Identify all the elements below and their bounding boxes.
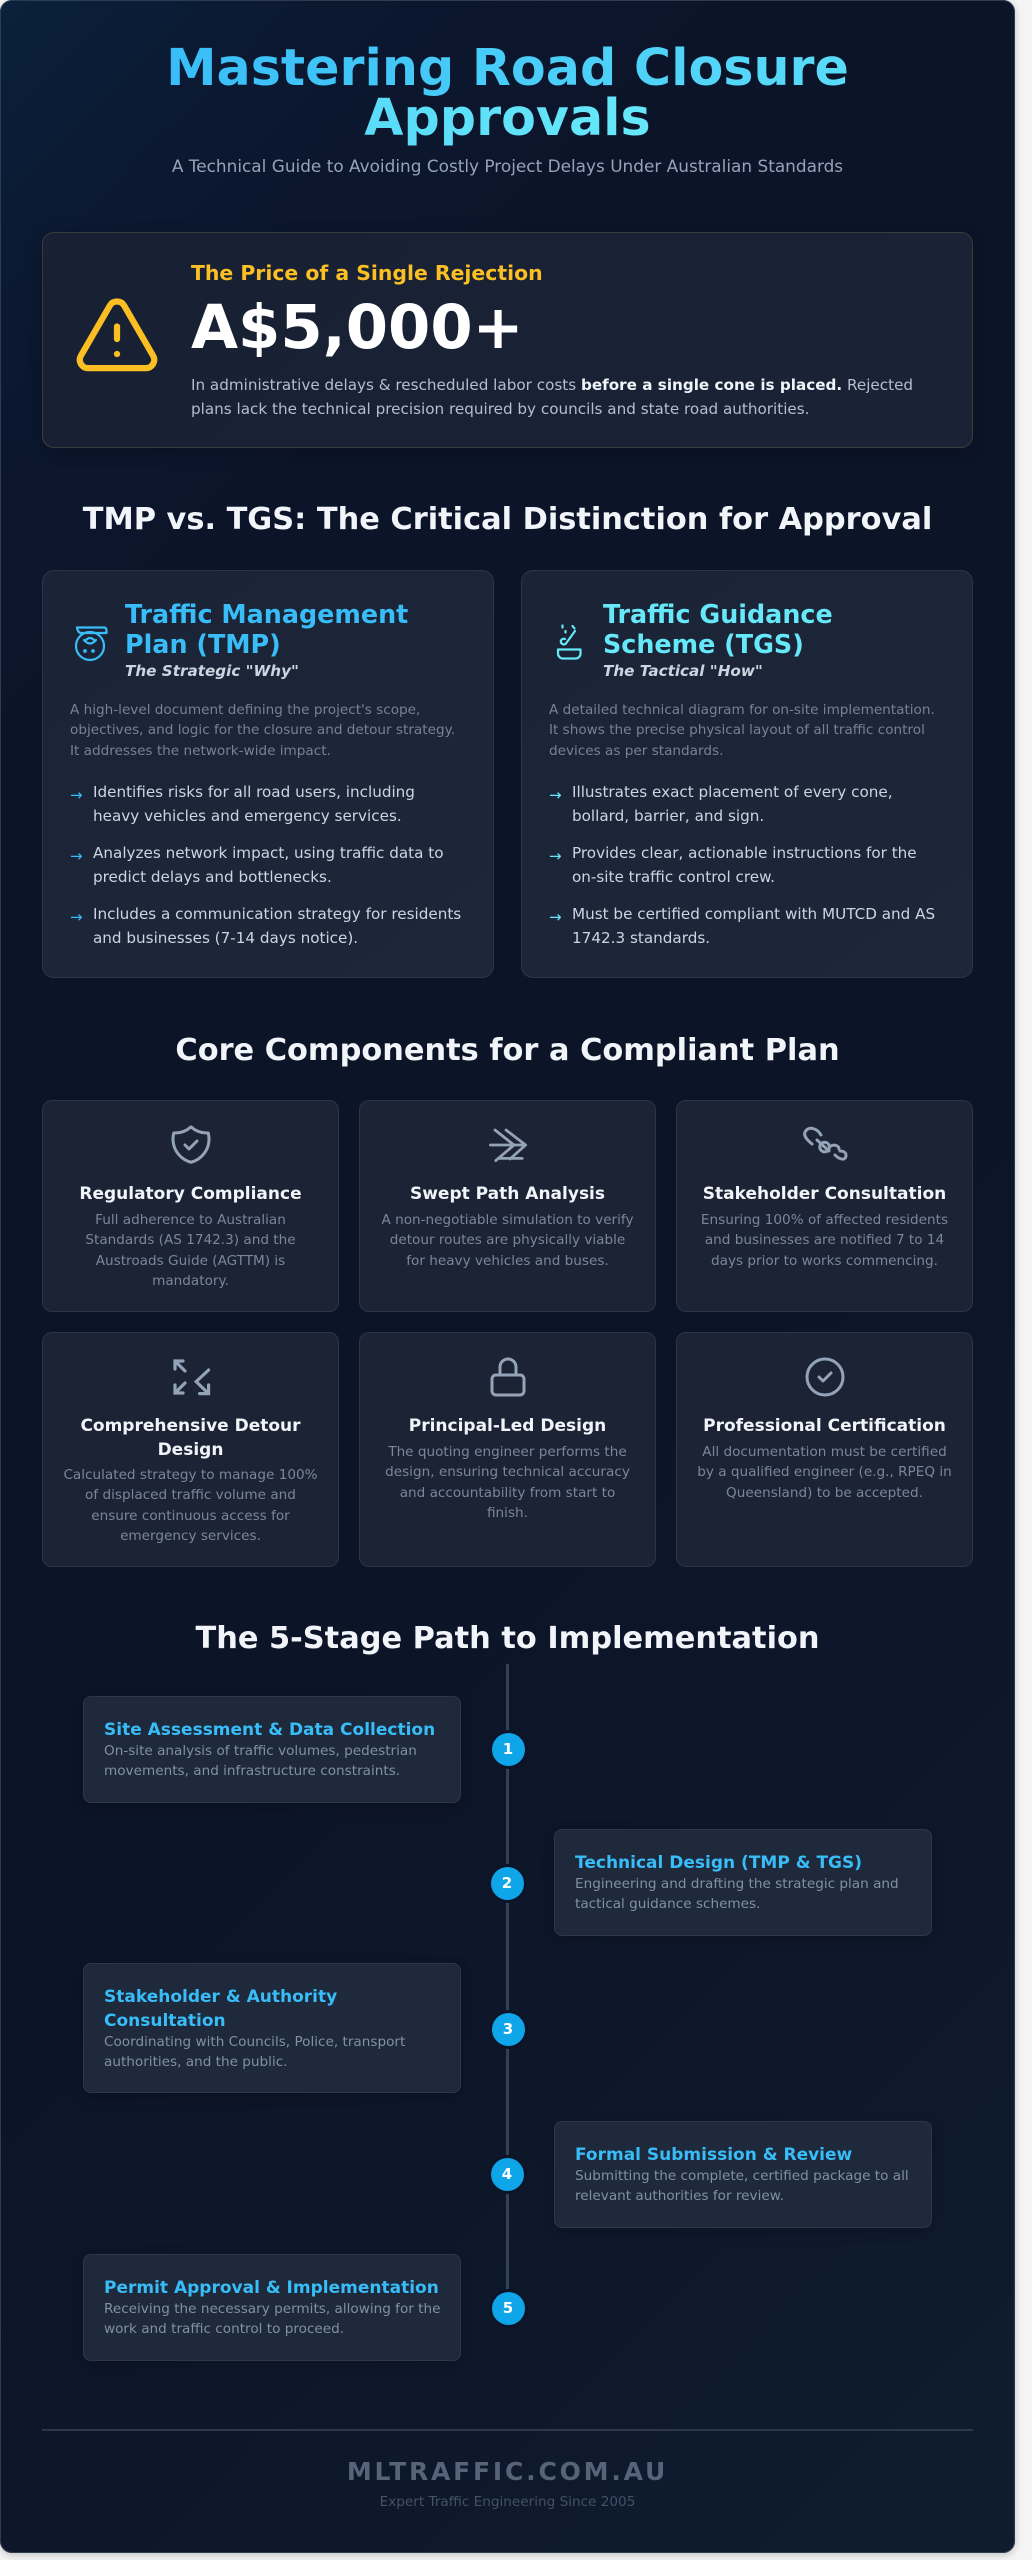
big cost figure: A$5,000+: [191, 293, 524, 363]
TMP point 2: [70, 844, 444, 886]
stage 1 card: [83, 1696, 461, 1803]
stage 5 text: Receiving the necessary permits, allowing for the: [104, 2301, 440, 2317]
stage 2 title: Technical Design (TMP & TGS): [575, 1853, 862, 1873]
stage 5 marker: [492, 2292, 524, 2325]
stage 2 card: [554, 1829, 932, 1936]
stage 2 text: tactical guidance schemes.: [575, 1896, 760, 1912]
feature text: Ensuring 100% of affected residents: [701, 1212, 948, 1228]
panel: regulatory compliance: [42, 1100, 339, 1312]
TMP subtitle: The Strategic "Why": [125, 662, 299, 680]
stage 2 marker: [490, 1867, 524, 1900]
TMP title: [125, 599, 408, 659]
panel: comprehensive detour design: [42, 1332, 339, 1567]
feature text: All documentation must be certified: [702, 1444, 947, 1460]
panel: professional certification: [676, 1332, 973, 1567]
feature text: [63, 1467, 318, 1544]
stage 5 text: work and traffic control to proceed.: [104, 2321, 344, 2337]
TMP point 3: and businesses (7-14 days notice).: [93, 929, 358, 947]
TGS point 2: Provides clear, actionable instructions for the: [572, 844, 917, 862]
icon: TGS: [556, 624, 582, 660]
heading: core components: Core Components for a Compliant Plan: [175, 1033, 840, 1068]
TGS title: [603, 599, 833, 659]
TMP point 1: →: [70, 786, 83, 804]
TGS title: Scheme (TGS): [603, 629, 804, 659]
feature title: Swept Path Analysis: [410, 1184, 605, 1204]
panel: stakeholder consultation: [676, 1100, 973, 1312]
stage 4 text: relevant authorities for review.: [575, 2188, 784, 2204]
TMP description: A high-level document defining the project's scope,: [70, 702, 420, 718]
TGS point 2: [549, 844, 917, 886]
stage 3 text: authorities, and the public.: [104, 2054, 288, 2070]
feature text: [381, 1212, 634, 1269]
stage 4 text: Submitting the complete, certified package to all: [575, 2168, 909, 2184]
feature title: [80, 1416, 301, 1460]
cost explanation: plans lack the technical precision required by councils and state road authorities.: [191, 400, 810, 418]
stage 1 marker: 1: [503, 1740, 513, 1758]
panel: principal-led design: [359, 1332, 656, 1567]
feature text: Standards (AS 1742.3) and the: [85, 1232, 296, 1248]
TMP point 3: [70, 905, 461, 947]
TMP description: objectives, and logic for the closure and detour strategy.: [70, 722, 455, 738]
TGS description: devices as per standards.: [549, 743, 723, 759]
TMP point 1: heavy vehicles and emergency services.: [93, 807, 402, 825]
stage 3 title: [104, 1987, 337, 2031]
icon: TMP: [74, 626, 108, 662]
stage 2 marker: 2: [502, 1874, 512, 1892]
stage 1 text: [104, 1743, 417, 1779]
TMP title: Traffic Management: [125, 599, 408, 629]
stage 5 marker: 5: [503, 2299, 513, 2317]
feature text: Full adherence to Australian: [95, 1212, 286, 1228]
feature text: mandatory.: [152, 1273, 229, 1289]
icon: check circle: [806, 1358, 844, 1396]
feature text: emergency services.: [120, 1528, 261, 1544]
subtitle: A Technical Guide to Avoiding Costly Project Delays Under Australian Standards: [172, 156, 843, 176]
feature text: and businesses are notified 7 to 14: [705, 1232, 944, 1248]
stage 3 marker: [492, 2013, 524, 2046]
stage 3 title: Stakeholder & Authority: [104, 1987, 337, 2007]
feature title: Principal-Led Design: [409, 1416, 606, 1436]
TGS description: It shows the precise physical layout of all traffic control: [549, 722, 925, 738]
icon: swept path: [489, 1128, 527, 1162]
feature title: Regulatory Compliance: [79, 1184, 302, 1204]
title: Approvals: [364, 88, 651, 147]
stage 5 card: [83, 2254, 461, 2361]
timeline: [83, 1664, 932, 2361]
heading: 5-stage path: The 5-Stage Path to Implementation: [195, 1621, 820, 1656]
TGS subtitle: The Tactical "How": [603, 662, 763, 680]
TGS point 1: bollard, barrier, and sign.: [572, 807, 764, 825]
icon: shield check: [172, 1125, 210, 1164]
TGS point 2: →: [549, 847, 562, 865]
TMP point 1: Identifies risks for all road users, including: [93, 783, 415, 801]
TMP point 2: →: [70, 847, 83, 865]
feature title: Professional Certification: [703, 1416, 946, 1436]
stage 2 text: Engineering and drafting the strategic plan and: [575, 1876, 899, 1892]
TGS title: Traffic Guidance: [603, 599, 833, 629]
TGS point 3: 1742.3 standards.: [572, 929, 710, 947]
feature text: days prior to works commencing.: [711, 1253, 938, 1269]
stage 3 text: [104, 2034, 405, 2070]
panel: swept path analysis: [359, 1100, 656, 1312]
feature text: by a qualified engineer (e.g., RPEQ in: [697, 1464, 952, 1480]
feature text: detour routes are physically viable: [390, 1232, 625, 1248]
title: [166, 38, 849, 147]
footer brand: MLTRAFFIC.COM.AU: [347, 2457, 668, 2486]
TGS description: [549, 702, 935, 759]
TGS point 1: →: [549, 786, 562, 804]
feature text: The quoting engineer performs the: [388, 1444, 627, 1460]
stage 4 text: [575, 2168, 909, 2204]
feature text: of displaced traffic volume and: [85, 1487, 296, 1503]
cost explanation: [191, 376, 913, 418]
TGS point 3: [549, 905, 935, 947]
title: Mastering Road Closure: [166, 38, 849, 97]
stage 3 title: Consultation: [104, 2011, 226, 2031]
TGS point 3: Must be certified compliant with MUTCD and AS: [572, 905, 935, 923]
TGS point 1: Illustrates exact placement of every cone,: [572, 783, 893, 801]
timeline spine: [506, 1664, 509, 2304]
stage 1 text: On-site analysis of traffic volumes, pedestrian: [104, 1743, 417, 1759]
feature title: Stakeholder Consultation: [703, 1184, 946, 1204]
feature text: ensure continuous access for: [91, 1508, 290, 1524]
feature text: finish.: [487, 1505, 528, 1521]
footer tagline: Expert Traffic Engineering Since 2005: [380, 2494, 635, 2510]
TMP point 1: [70, 783, 415, 825]
TMP point 3: →: [70, 908, 83, 926]
stage 1 text: movements, and infrastructure constraints.: [104, 1763, 400, 1779]
TGS point 3: →: [549, 908, 562, 926]
panel: traffic management plan: [42, 570, 494, 978]
panel: price of a single rejection: [42, 232, 973, 448]
feature text: [385, 1444, 630, 1521]
stage 3 marker: 3: [503, 2020, 513, 2038]
icon: chain link: [803, 1126, 848, 1161]
feature text: for heavy vehicles and buses.: [406, 1253, 609, 1269]
TGS description: A detailed technical diagram for on-site implementation.: [549, 702, 935, 718]
feature text: and accountability from start to: [400, 1485, 615, 1501]
feature text: [701, 1212, 948, 1269]
icon: detour arrows: [173, 1359, 210, 1396]
TMP point 2: Analyzes network impact, using traffic data to: [93, 844, 444, 862]
feature text: Austroads Guide (AGTTM) is: [96, 1253, 285, 1269]
feature text: A non-negotiable simulation to verify: [381, 1212, 634, 1228]
cost explanation: In administrative delays & rescheduled labor costs before a single cone is placed. Rejected: [191, 376, 913, 394]
stage 4 marker: 4: [502, 2165, 512, 2183]
stage 1 marker: [492, 1733, 524, 1766]
feature text: [85, 1212, 296, 1289]
stage 4 card: [554, 2121, 932, 2228]
stage 5 title: Permit Approval & Implementation: [104, 2278, 439, 2298]
feature title: Design: [158, 1440, 223, 1460]
stage 5 text: [104, 2301, 440, 2337]
heading: TMP vs TGS: TMP vs. TGS: The Critical Distinction for Approval: [83, 502, 932, 537]
icon: lock: [490, 1358, 526, 1396]
feature text: design, ensuring technical accuracy: [385, 1464, 630, 1480]
TMP description: [70, 702, 455, 759]
stage 2 text: [575, 1876, 899, 1912]
rejection heading: The Price of a Single Rejection: [191, 261, 543, 285]
TMP point 3: Includes a communication strategy for residents: [93, 905, 461, 923]
TGS point 2: on-site traffic control crew.: [572, 868, 775, 886]
TGS point 1: [549, 783, 893, 825]
stage 3 text: Coordinating with Councils, Police, transport: [104, 2034, 405, 2050]
feature title: Comprehensive Detour: [80, 1416, 301, 1436]
TMP description: It addresses the network-wide impact.: [70, 743, 331, 759]
stage 4 title: Formal Submission & Review: [575, 2145, 852, 2165]
stage 4 marker: [490, 2158, 524, 2191]
TMP point 2: predict delays and bottlenecks.: [93, 868, 332, 886]
feature text: Calculated strategy to manage 100%: [63, 1467, 318, 1483]
feature text: Queensland) to be accepted.: [726, 1485, 923, 1501]
panel: traffic guidance scheme: [521, 570, 973, 978]
stage 1 title: Site Assessment & Data Collection: [104, 1720, 435, 1740]
stage 3 card: [83, 1963, 461, 2093]
feature text: [697, 1444, 952, 1501]
TMP title: Plan (TMP): [125, 629, 281, 659]
icon: warning triangle: [76, 298, 158, 372]
